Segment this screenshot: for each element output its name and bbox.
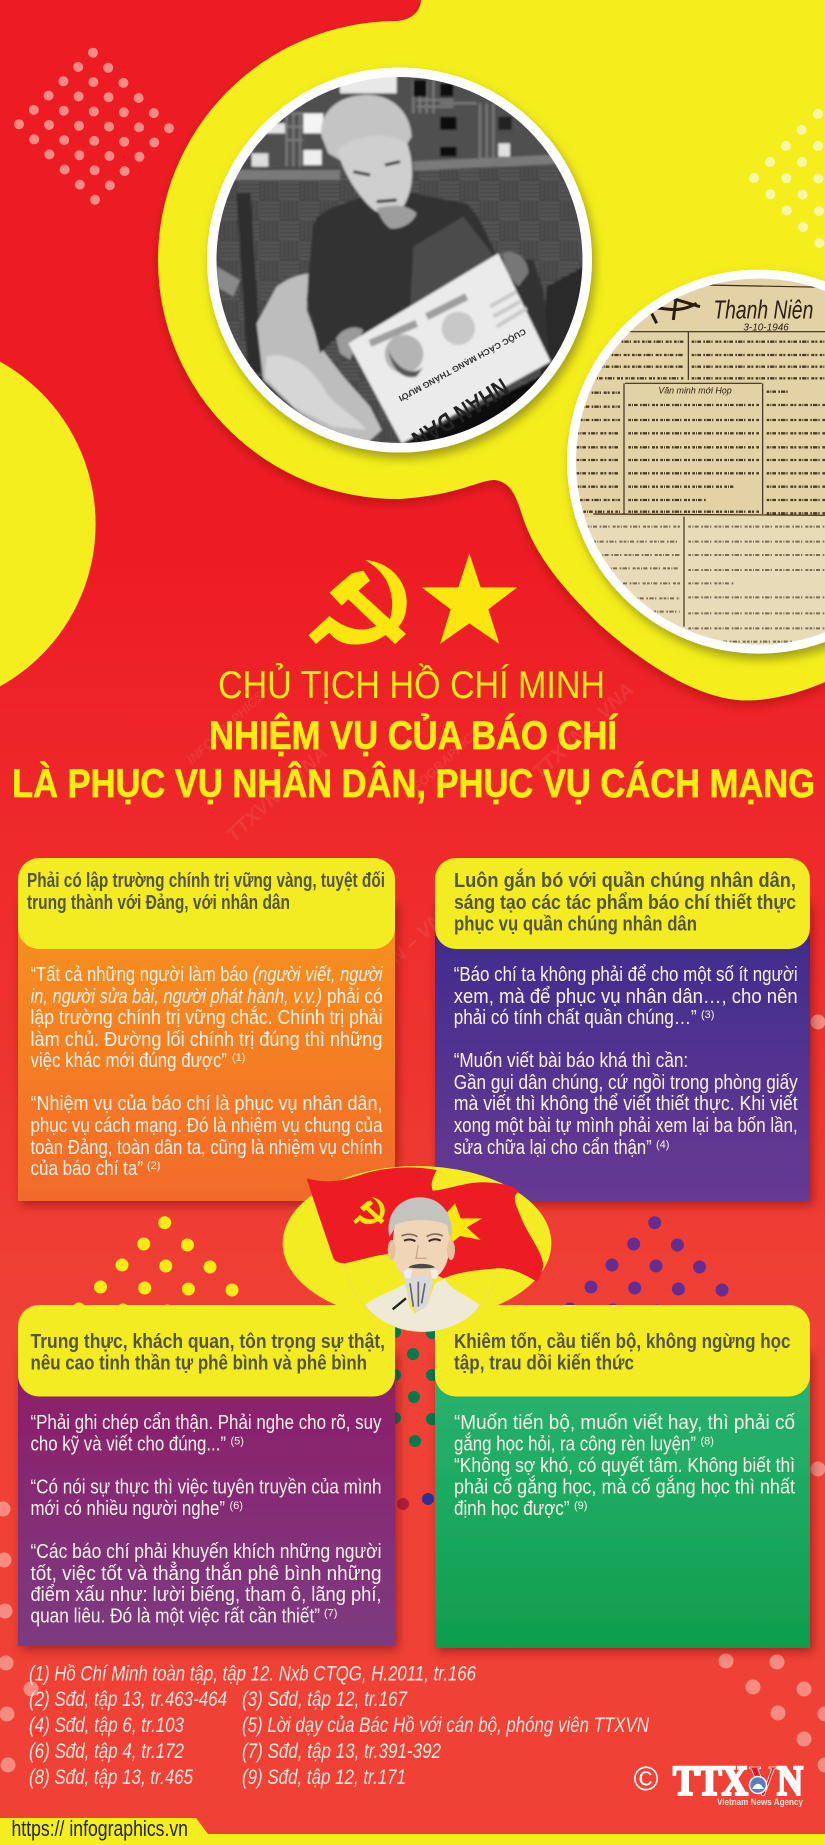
references: (4) Sđd, tập 6, tr.103 [29,1714,184,1737]
quotes: modesty and learning: “Muốn tiến bộ, muốn viết hay, thì phải cố [454,1412,795,1434]
photo: President Ho Chi Minh reading Nhan Dan: NHAN DAN [407,372,514,455]
logo: TTXVN: N [777,1759,803,1805]
heading: close to the masses: phục vụ quần chúng nhân dân [454,914,697,936]
quotes: close to the masses [454,964,798,1159]
quotes: honesty and objectivity: “Phải ghi chép cẩn thận. Phải nghe cho rõ, suy [30,1412,382,1434]
quotes: modesty and learning: gắng học hỏi, ra công rèn luyện” [454,1432,696,1456]
photo: Thanh Nien newspaper: Văn minh mới Họp [658,385,732,395]
footer band with URL: https:// infographics.vn [12,1816,188,1841]
quotes: honesty and objectivity: (6) [230,1500,243,1512]
decorative dots: crimson and blue [397,1493,434,1510]
icon: gold star [422,553,517,644]
quotes: honesty and objectivity: “Các báo chí phải khuyến khích những người [30,1541,382,1563]
decorative dots: pink lower [3,1022,825,1765]
references: (3) Sđd, tập 12, tr.167 [242,1688,408,1711]
yellow blob behind photos [158,0,825,700]
quotes: political stance: in, người sửa bài, người phát hành, v.v.) [30,986,322,1008]
quotes: political stance: “Tất cả những người làm báo [30,964,248,986]
photo: President Ho Chi Minh reading Nhan Dan: CUỘC CÁCH MẠNG THÁNG MƯỜI [397,327,528,405]
logo: TTXVN: Vietnam News Agency [717,1797,803,1807]
quotes: political stance: (1) [232,1052,245,1064]
references: (8) Sđd, tập 13, tr.465 [29,1766,193,1789]
quotes: political stance [30,964,383,1180]
photo: Thanh Nien newspaper [560,260,825,660]
title: CHỦ TỊCH HỒ CHÍ MINH [218,663,605,707]
heading: honesty and objectivity [30,1331,385,1374]
quotes: modesty and learning: định học được” [454,1498,570,1520]
quotes: political stance: của báo chí ta” [30,1158,143,1180]
decorative dots: pale yellow [754,114,819,243]
yellow circle on left edge [0,338,96,710]
decorative dots: yellow triangle [79,1223,232,1312]
quotes: political stance: (người viết, người [253,964,383,986]
quotes: modesty and learning [454,1412,795,1520]
portrait with party and national flags [283,1166,551,1332]
references [29,1663,650,1789]
quotes: political stance: phục vụ cách mạng. Đó là nhiệm vụ chung của [30,1115,383,1137]
references: (9) Sđd, tập 12, tr.171 [242,1766,406,1789]
heading: close to the masses: Luôn gắn bó với quần chúng nhân dân, [454,868,796,892]
quotes: honesty and objectivity: tốt, việc tốt và thẳng thắn phê bình những [30,1561,382,1585]
title [12,663,815,806]
heading: honesty and objectivity: Trung thực, khách quan, tôn trọng sự thật, [30,1331,385,1353]
icon: hammer and sickle [308,560,407,644]
quotes: honesty and objectivity: cho kỹ và viết cho đúng...” [30,1434,226,1456]
references: (1) Hồ Chí Minh toàn tập, tập 12. Nxb CTQG, H.2011, tr.166 [29,1663,476,1686]
watermark [184,679,639,1114]
logo: TTXVN: © [633,1760,659,1798]
watermark: INFOGRAPHICS [400,724,483,803]
quotes: political stance: (2) [147,1160,160,1172]
panel: honesty and objectivity [18,1305,395,1646]
quotes: political stance: “Nhiệm vụ của báo chí là phục vụ nhân dân, [30,1093,382,1115]
title: NHIỆM VỤ CỦA BÁO CHÍ [209,712,618,758]
panel: political stance [18,858,395,1201]
logo: TTXVN: TTX [673,1759,748,1805]
watermark: TTXVN – VNA [238,1009,349,1114]
quotes: close to the masses: “Muốn viết bài báo khá thì cần: [454,1050,688,1072]
heading: modesty and learning [454,1331,790,1374]
references: (7) Sđd, tập 13, tr.391-392 [242,1740,441,1763]
quotes: honesty and objectivity: (7) [324,1608,337,1620]
watermark: TTXVN – VNA [528,679,639,784]
watermark: TTXVN – VNA [348,899,459,1004]
quotes: political stance: việc khác mới đúng được” [30,1050,227,1072]
photo: Thanh Nien newspaper: 3-10-1946 [743,323,789,334]
quotes: close to the masses: sửa chữa lại cho cẩn thận” [454,1137,652,1159]
references: (2) Sđd, tập 13, tr.463-464 [29,1688,227,1711]
quotes: close to the masses: (3) [701,1009,714,1021]
watermark: TTXVN – VNA [222,742,333,847]
quotes: political stance: phải có [327,986,383,1008]
quotes: political stance: lập trường chính trị vững chắc. Chính trị phải [30,1006,382,1029]
quotes: honesty and objectivity: điểm xấu như: lười biếng, tham ô, lãng phí, [30,1584,382,1606]
quotes: modesty and learning: phải cố gắng học, mà cố gắng học thì nhất [454,1476,795,1498]
references: (5) Lời dạy của Bác Hồ với cán bộ, phóng viên TTXVN [242,1714,650,1737]
quotes: modesty and learning: (8) [700,1436,714,1448]
photo: President Ho Chi Minh reading Nhan Dan [200,60,600,460]
logo: TTXVN: V [749,1759,777,1805]
quotes: honesty and objectivity: quan liêu. Đó là một việc rất cần thiết” [30,1606,320,1628]
quotes: close to the masses: phải có tính chất quần chúng…” [454,1007,697,1029]
references: (6) Sđd, tập 4, tr.172 [29,1740,184,1763]
quotes: honesty and objectivity: “Có nói sự thực thì việc tuyên truyền của mình [30,1476,382,1498]
quotes: political stance: làm chủ. Đường lối chính trị đúng thì những [30,1029,382,1051]
decorative dots: green column [395,1332,432,1441]
heading: close to the masses [454,868,796,936]
heading: political stance: Phải có lập trường chính trị vững vàng, tuyệt đối [27,870,385,892]
decorative dots: pink diamond [19,53,169,200]
panel: close to the masses [435,858,810,1201]
heading: political stance [27,870,385,914]
watermark: INFOGRAPHICS [184,688,267,767]
decorative dots: purple triangle [570,1223,722,1312]
quotes: modesty and learning: (9) [574,1500,587,1512]
heading: political stance: trung thành với Đảng, với nhân dân [27,892,290,914]
logo: TTXVN [633,1759,803,1807]
quotes: close to the masses: (4) [656,1139,669,1151]
panel: modesty and learning [435,1305,810,1648]
heading: honesty and objectivity: nêu cao tinh thần tự phê bình và phê bình [30,1352,367,1374]
quotes: honesty and objectivity [30,1412,382,1628]
quotes: honesty and objectivity: (5) [230,1436,244,1448]
footer band with URL [0,1816,825,1845]
quotes: close to the masses: xem, mà để phục vụ nhân dân…, cho nên [454,986,798,1008]
quotes: honesty and objectivity: mới có nhiều người nghe” [30,1498,225,1520]
heading: modesty and learning: tập, trau dồi kiến thức [454,1352,634,1374]
quotes: political stance: toàn Đảng, toàn dân ta, cũng là nhiệm vụ chính [30,1137,382,1159]
